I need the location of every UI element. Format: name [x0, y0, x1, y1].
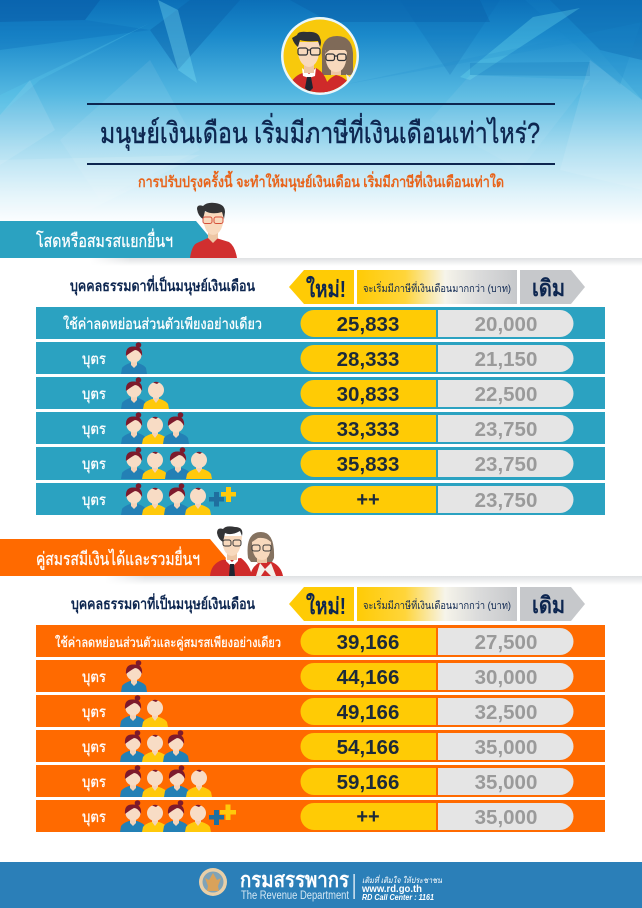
- section 2 table header: [71, 587, 585, 621]
- row: 1 child: 21,150: [475, 348, 537, 371]
- title: มนุษย์เงินเดือน เริ่มมีภาษีที่เงินเดือนเท่าไหร่?: [100, 113, 540, 151]
- row: 2 children: 30,833: [337, 383, 399, 406]
- row: 2 children: [36, 377, 605, 409]
- agency name English: The Revenue Department: [241, 890, 350, 902]
- gradient caption: จะเริ่มมีภาษีที่เงินเดือนมากกว่า (บาท): [363, 281, 511, 295]
- section 1 shadow strip: [90, 258, 642, 266]
- row: 2 children: [36, 695, 605, 727]
- row: personal and spouse allowance only: [36, 625, 605, 657]
- row: 3 children: 23,750: [475, 418, 537, 441]
- label: salaried individual: บุคคลธรรมดาที่เป็นมนุษย์เงินเดือน: [71, 593, 256, 614]
- row: personal allowance only: 20,000: [475, 313, 537, 336]
- badge: old: [520, 270, 585, 304]
- slogan: เติมที่ เติมใจ ให้ประชาชน: [362, 874, 442, 885]
- row: 3 children: [36, 412, 605, 444]
- row: 3 children: บุตร: [82, 739, 106, 757]
- row: 1 child: บุตร: [82, 669, 106, 687]
- subtitle: การปรับปรุงครั้งนี้ จะทำให้มนุษย์เงินเดือน เริ่มมีภาษีที่เงินเดือนเท่าใด: [138, 170, 504, 192]
- icon: couple in red suits: [210, 526, 283, 576]
- row: 3 children: 54,166: [337, 736, 399, 759]
- row: more than 4 children: 35,000: [475, 806, 537, 829]
- row: 3 children: บุตร: [82, 421, 106, 439]
- background: blue low-poly header: [0, 0, 642, 225]
- row: 1 child: [36, 342, 605, 374]
- section 1 tab: single or separated: [0, 221, 212, 258]
- row: 1 child: 28,333: [337, 348, 399, 371]
- badge: old: [520, 587, 585, 621]
- section 2 tab: spouse with income, joint filing: [0, 539, 226, 576]
- row: 4 children: 23,750: [475, 453, 537, 476]
- row: personal and spouse allowance only: 39,166: [337, 631, 399, 654]
- row: personal allowance only: 25,833: [337, 313, 399, 336]
- icon: couple portrait medallion: [281, 17, 359, 96]
- row: 4 children: 35,000: [475, 771, 537, 794]
- section 2 table rows: [36, 625, 605, 832]
- row: personal allowance only: [36, 307, 605, 339]
- icon: man with red shirt: [190, 203, 237, 258]
- badge: new: [289, 270, 354, 304]
- row: 4 children: 59,166: [337, 771, 399, 794]
- row: 3 children: 33,333: [337, 418, 399, 441]
- divider: [354, 874, 355, 899]
- row: more than 4 children: 23,750: [475, 489, 537, 512]
- row: personal allowance only: ใช้ค่าลดหย่อนส่วนตัวเพียงอย่างเดียว: [63, 315, 262, 333]
- section 1 table header: [70, 270, 585, 304]
- row: 2 children: 49,166: [337, 701, 399, 724]
- gradient caption: [357, 587, 517, 621]
- row: 1 child: 30,000: [475, 666, 537, 689]
- row: more than 4 children: [36, 800, 605, 832]
- badge: new: ใหม่!: [306, 275, 346, 302]
- row: 3 children: 35,000: [475, 736, 537, 759]
- row: more than 4 children: [36, 483, 605, 515]
- gradient caption: จะเริ่มมีภาษีที่เงินเดือนมากกว่า (บาท): [363, 598, 511, 612]
- row: more than 4 children: บุตร: [82, 809, 106, 827]
- section 2 tab: spouse with income, joint filing: คู่สมรสมีเงินได้และรวมยื่นฯ: [36, 546, 200, 570]
- section 2 shadow strip: [105, 576, 642, 585]
- row: 3 children: [36, 730, 605, 762]
- row: more than 4 children: บุตร: [82, 492, 106, 510]
- row: 2 children: บุตร: [82, 386, 106, 404]
- row: 4 children: บุตร: [82, 456, 106, 474]
- gradient caption: [357, 270, 517, 304]
- section 1 tab: single or separated: โสดหรือสมรสแยกยื่นฯ: [36, 228, 173, 251]
- footer bar: [0, 862, 642, 908]
- label: salaried individual: บุคคลธรรมดาที่เป็นมนุษย์เงินเดือน: [70, 275, 256, 296]
- badge: new: ใหม่!: [306, 592, 346, 619]
- row: 1 child: บุตร: [82, 351, 106, 369]
- row: personal and spouse allowance only: 27,500: [475, 631, 537, 654]
- badge: old: เดิม: [532, 275, 565, 301]
- website: www.rd.go.th: [361, 884, 422, 895]
- row: 4 children: บุตร: [82, 774, 106, 792]
- row: 2 children: บุตร: [82, 704, 106, 722]
- title rule top: [87, 103, 555, 105]
- row: 1 child: 44,166: [337, 666, 399, 689]
- agency name: กรมสรรพากร: [240, 869, 350, 892]
- badge: new: [289, 587, 354, 621]
- section 1 table rows: [36, 307, 605, 515]
- row: 1 child: [36, 660, 605, 692]
- row: 4 children: 35,833: [337, 453, 399, 476]
- row: 4 children: [36, 765, 605, 797]
- call center: RD Call Center : 1161: [362, 893, 434, 902]
- title rule bottom: [87, 163, 555, 165]
- row: more than 4 children: ++: [356, 806, 380, 828]
- icon: Revenue Department seal: [199, 868, 227, 896]
- badge: old: เดิม: [532, 592, 565, 618]
- row: 2 children: 32,500: [475, 701, 537, 724]
- row: more than 4 children: ++: [356, 489, 380, 511]
- row: 2 children: 22,500: [475, 383, 537, 406]
- row: personal and spouse allowance only: ใช้ค่าลดหย่อนส่วนตัวและคู่สมรสเพียงอย่างเดียว: [55, 634, 281, 651]
- row: 4 children: [36, 447, 605, 480]
